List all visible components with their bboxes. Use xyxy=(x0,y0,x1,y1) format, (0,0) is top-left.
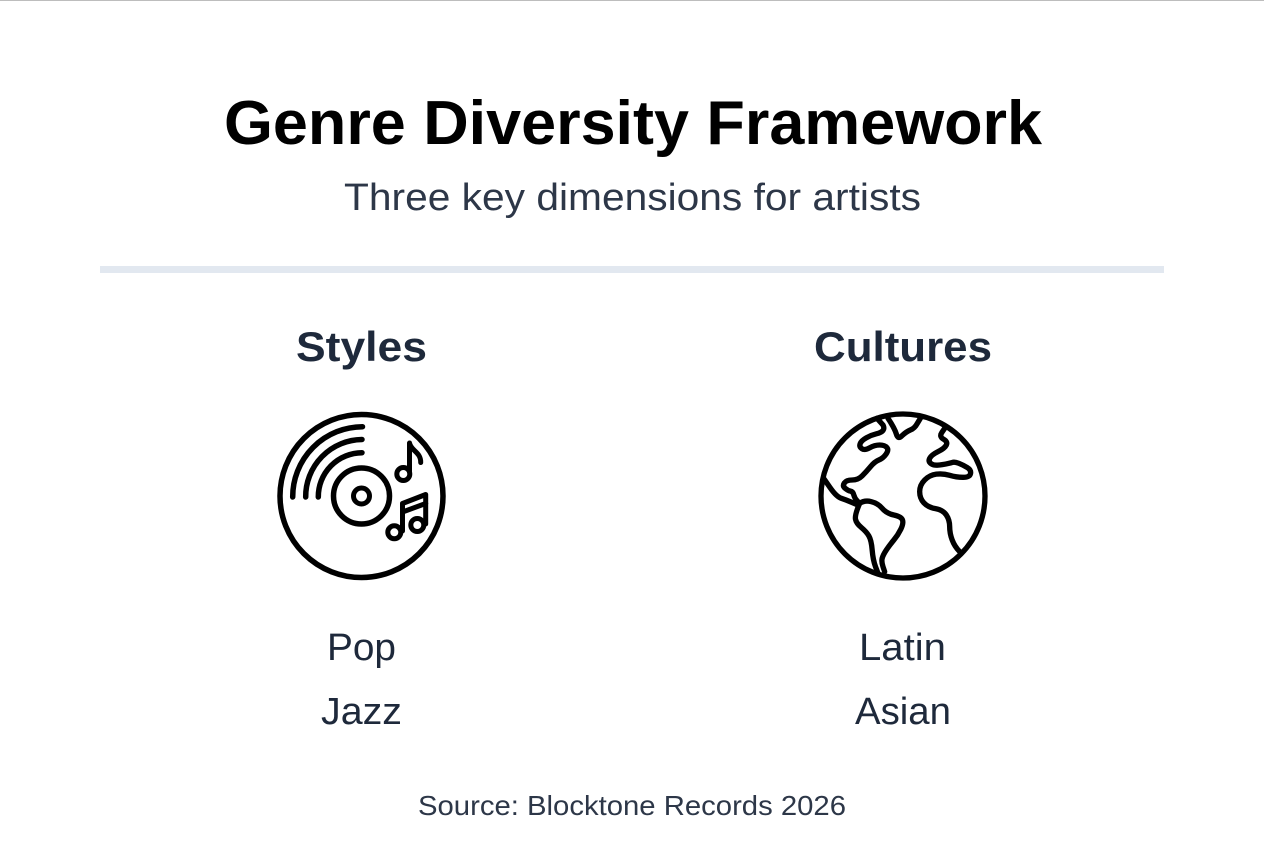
heading: styles: Styles xyxy=(296,323,427,370)
panel: cultures xyxy=(814,323,992,733)
subtitle: Three key dimensions for artists xyxy=(344,177,921,219)
icon: globe xyxy=(821,414,985,578)
icon: vinyl record with music notes xyxy=(280,414,443,578)
title: Genre Diversity Framework xyxy=(224,89,1043,158)
label: Pop: Pop xyxy=(327,627,396,669)
label: Latin: Latin xyxy=(859,627,946,669)
source note: Source: Blocktone Records 2026 xyxy=(418,790,846,821)
label: Jazz: Jazz xyxy=(321,691,402,733)
panel: styles xyxy=(280,323,443,733)
label: Asian: Asian xyxy=(855,691,951,733)
heading: cultures: Cultures xyxy=(814,323,992,370)
